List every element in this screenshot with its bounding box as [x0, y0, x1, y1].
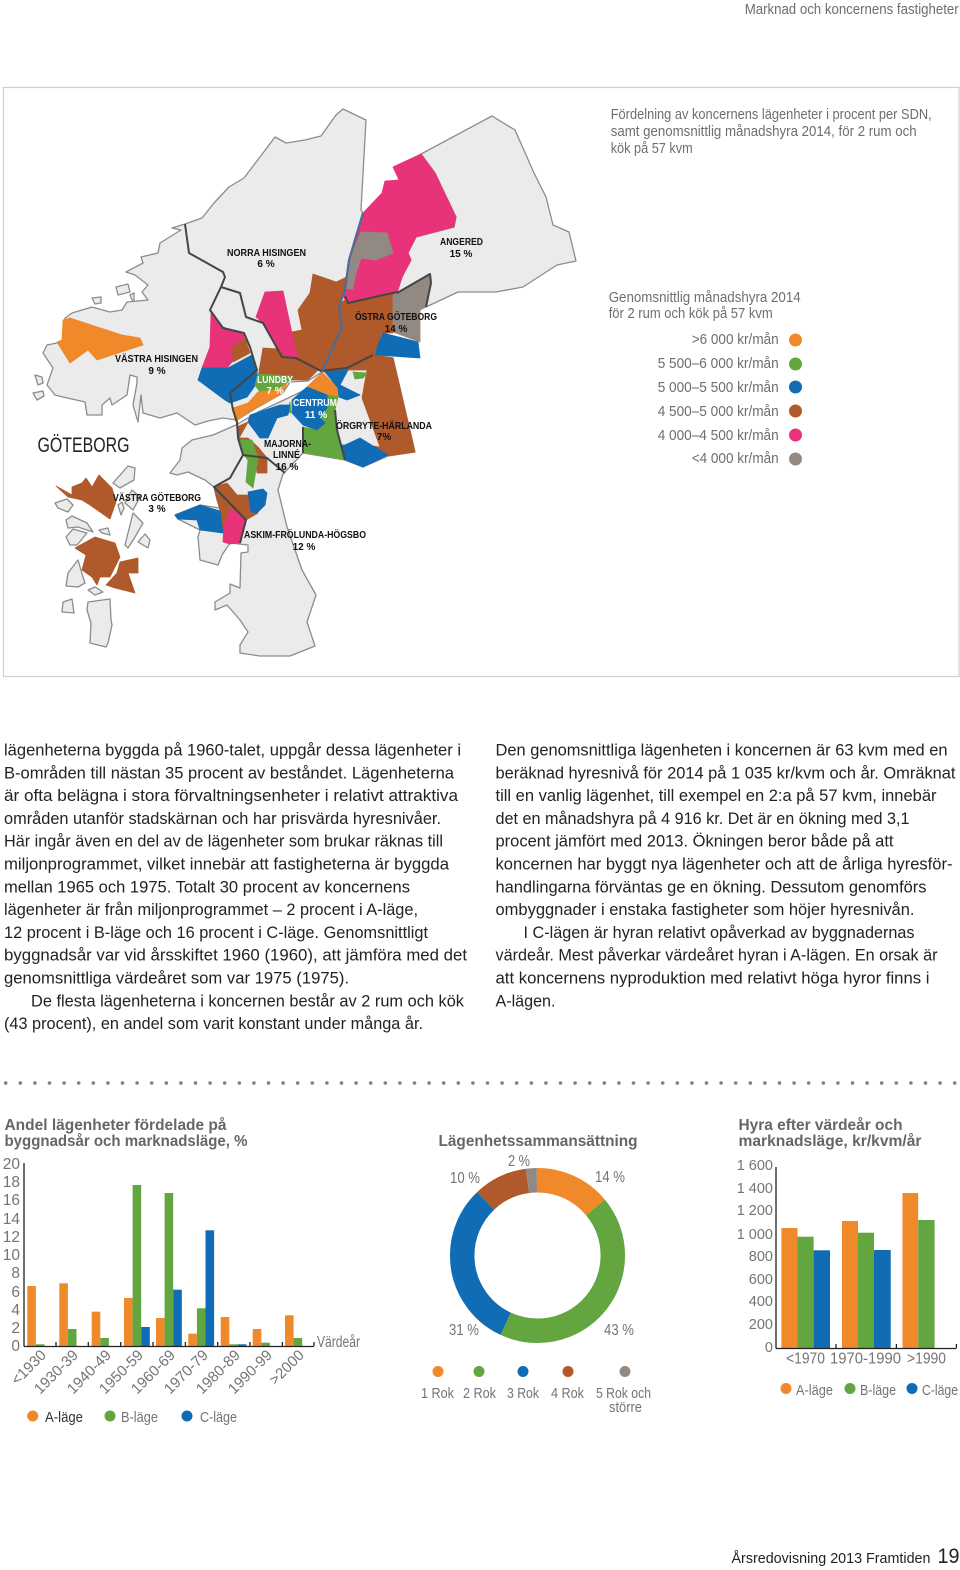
map labels: districts: 16 %: [276, 462, 299, 473]
chart: apartments by building year and market position: [3, 1116, 360, 1426]
y-axis labels: [737, 1158, 773, 1356]
text column: left: De flesta lägenheterna i koncernen består av 2 rum och kök: [31, 992, 465, 1010]
map labels: districts: ANGERED: [440, 237, 483, 248]
axes: [24, 1163, 314, 1346]
axis title: Värdeår: Värdeår: [317, 1334, 360, 1351]
legend: [780, 1383, 958, 1399]
x-axis labels: <1970: [786, 1350, 825, 1368]
y-axis labels: 18: [3, 1174, 20, 1191]
text column: right: ombyggnader i enstaka fastigheter som höjer hyresnivån.: [496, 901, 914, 919]
text column: left: byggnadsår var vid årsskiftet 1960 (1960), att jämföra med det: [4, 947, 467, 965]
text column: right: [496, 742, 956, 1010]
map labels: districts: ÖRGRYTE-HÄRLANDA: [336, 419, 432, 432]
y-axis labels: 1 600: [737, 1158, 773, 1174]
text column: right: beräknad hyresnivå för 2014 på 1 035 kr/kvm och år. Omräknat: [496, 764, 956, 782]
legend: 5 Rok och: [596, 1386, 651, 1402]
map labels: districts: [113, 237, 483, 553]
text column: right: koncernen har byggt nya lägenheter och att de årliga hyresför-: [496, 856, 952, 874]
map labels: districts: 9 %: [148, 366, 166, 377]
y-axis labels: 2: [11, 1320, 20, 1337]
chart title: [4, 1116, 248, 1150]
text column: left: B-områden till nästan 35 procent av beståndet. Lägenheterna: [4, 764, 455, 782]
map labels: districts: 14 %: [385, 324, 408, 335]
chart title: Hyra efter värdeår och: [738, 1116, 902, 1134]
y-axis labels: 6: [11, 1284, 20, 1301]
map label: Göteborg: GÖTEBORG: [38, 434, 130, 457]
legend: [27, 1410, 237, 1426]
map: river: [322, 213, 363, 372]
text column: right: procent jämfört med 2013. Ökningen beror både på att: [496, 833, 894, 851]
x-axis labels: 1930-39: [31, 1347, 82, 1398]
text column: left: mellan 1965 och 1975. Totalt 30 procent av koncernens: [4, 878, 410, 896]
percentage labels: 10 %: [450, 1170, 480, 1187]
y-axis labels: 1 000: [737, 1227, 773, 1243]
map legend: monthly rent: 4 500–5 000 kr/mån: [658, 403, 779, 420]
legend: A-läge: [45, 1410, 83, 1426]
text column: right: att koncernens nyproduktion med relativt höga hyror finns i: [496, 970, 930, 988]
map labels: districts: VÄSTRA HISINGEN: [115, 352, 198, 365]
text column: left: områden utanför stadskärnan och har prisvärda hyresnivåer.: [4, 810, 441, 828]
legend: 3 Rok: [507, 1386, 540, 1402]
map labels: districts: LINNÉ: [273, 448, 300, 461]
legend: 4 Rok: [551, 1386, 585, 1402]
y-axis labels: 400: [749, 1294, 773, 1310]
x-axis labels: 1990-99: [225, 1347, 276, 1398]
x-axis labels: 1980-89: [193, 1347, 244, 1398]
x-axis labels: 1950-59: [96, 1347, 147, 1398]
map labels: districts: ÖSTRA GÖTEBORG: [355, 310, 437, 323]
map labels: districts: NORRA HISINGEN: [227, 248, 306, 259]
y-axis labels: 1 200: [737, 1203, 773, 1219]
y-axis labels: 0: [11, 1338, 20, 1355]
chart title: Andel lägenheter fördelade på: [4, 1116, 227, 1134]
percentage labels: 31 %: [449, 1322, 479, 1339]
map: land areas: [33, 109, 576, 656]
y-axis labels: 12: [3, 1229, 20, 1246]
legend: 1 Rok: [421, 1386, 455, 1402]
y-axis labels: 1 400: [737, 1181, 773, 1197]
text column: left: lägenheter är från miljonprogrammet – 2 procent i A-läge,: [4, 901, 418, 919]
text column: right: värdeår. Mest påverkar värdeåret hyran i A-lägen. En orsak är: [496, 947, 938, 965]
legend: B-läge: [121, 1410, 158, 1426]
legend: större: [609, 1400, 642, 1416]
page footer: Årsredovisning 2013 Framtiden: [732, 1550, 930, 1567]
text column: right: A-lägen.: [496, 992, 556, 1010]
text column: left: (43 procent), en andel som varit konstant under många år.: [4, 1015, 423, 1033]
map labels: districts: 15 %: [450, 249, 473, 260]
map labels: districts: 7 %: [266, 386, 284, 397]
legend: A-läge: [796, 1383, 833, 1399]
percentage labels: [449, 1153, 634, 1339]
y-axis labels: 14: [3, 1211, 20, 1228]
map legend: monthly rent: Genomsnittlig månadshyra 2014: [609, 289, 801, 306]
x-axis labels: 1970-79: [161, 1347, 212, 1398]
y-axis labels: 0: [765, 1340, 773, 1356]
y-axis labels: 4: [11, 1302, 20, 1319]
x-axis labels: [786, 1350, 946, 1368]
map description: kök på 57 kvm: [611, 140, 693, 157]
x-axis labels: 1960-69: [128, 1347, 179, 1398]
chart title: Lägenhetssammansättning: [438, 1133, 638, 1150]
axes: [776, 1167, 956, 1348]
map labels: districts: 11 %: [305, 410, 327, 421]
bars: [27, 1185, 302, 1346]
map: district borders: [185, 224, 431, 543]
map labels: districts: 3 %: [148, 504, 166, 515]
y-axis labels: 10: [3, 1247, 20, 1264]
y-axis labels: 600: [749, 1272, 773, 1288]
text column: left: lägenheterna byggda på 1960-talet, uppgår dessa lägenheter i: [4, 742, 461, 760]
page footer: [732, 1545, 960, 1568]
map labels: districts: LUNDBY: [257, 375, 293, 386]
map labels: districts: 6 %: [257, 259, 275, 270]
chart title: marknadsläge, kr/kvm/år: [738, 1132, 922, 1150]
text column: left: 12 procent i B-läge och 16 procent i C-läge. Genomsnittligt: [4, 924, 428, 942]
y-axis labels: [3, 1156, 20, 1355]
map labels: districts: CENTRUM: [293, 398, 337, 409]
panel: map of Göteborg: [4, 88, 959, 676]
chart title: [738, 1116, 922, 1150]
map labels: districts: VÄSTRA GÖTEBORG: [113, 491, 201, 504]
y-axis labels: 16: [3, 1192, 20, 1209]
text column: left: miljonprogrammet, vilket innebär att fastigheterna är byggda: [4, 856, 450, 874]
map legend: monthly rent: 5 500–6 000 kr/mån: [658, 355, 779, 372]
text column: right: Den genomsnittliga lägenheten i koncernen är 63 kvm med en: [496, 742, 948, 760]
text column: left: Här ingår även en del av de lägenheter som brukar räknas till: [4, 833, 443, 851]
map legend: monthly rent: <4 000 kr/mån: [692, 450, 779, 467]
y-axis labels: 800: [749, 1249, 773, 1265]
map legend: monthly rent: för 2 rum och kök på 57 kvm: [609, 305, 773, 322]
x-axis labels: 1940-49: [64, 1347, 115, 1398]
map legend: monthly rent: [609, 289, 802, 467]
x-axis labels: >1990: [907, 1350, 946, 1368]
map labels: districts: ASKIM-FRÖLUNDA-HÖGSBO: [244, 528, 366, 541]
map description: samt genomsnittlig månadshyra 2014, för 2 rum och: [611, 123, 917, 140]
y-axis labels: 200: [749, 1317, 773, 1333]
legend: C-läge: [200, 1410, 237, 1426]
percentage labels: 14 %: [595, 1169, 625, 1186]
map legend: monthly rent: 4 000–4 500 kr/mån: [658, 427, 779, 444]
text column: right: det en månadshyra på 4 916 kr. Det är en ökning med 3,1: [496, 810, 910, 828]
donut: [462, 1180, 613, 1331]
map legend: monthly rent: >6 000 kr/mån: [692, 331, 779, 348]
x-axis labels: 1970-1990: [830, 1350, 901, 1368]
map labels: districts: MAJORNA-: [264, 439, 311, 450]
text column: right: till en vanlig lägenhet, till exempel en 2:a på 57 kvm, innebär: [496, 787, 937, 805]
legend: [421, 1366, 651, 1416]
map description: [611, 106, 932, 157]
x-axis labels: <1930: [8, 1347, 50, 1389]
text column: right: handlingarna förväntas ge en ökning. Dessutom genomförs: [496, 878, 926, 896]
map labels: districts: 12 %: [293, 542, 316, 553]
legend: 2 Rok: [463, 1386, 497, 1402]
chart: rent by value year and market position: [737, 1116, 958, 1399]
x-axis labels: >2000: [266, 1347, 308, 1389]
map: rent level areas: [56, 154, 456, 593]
map legend: monthly rent: 5 000–5 500 kr/mån: [658, 379, 779, 396]
chart title: byggnadsår och marknadsläge, %: [4, 1132, 248, 1150]
y-axis labels: 8: [11, 1265, 20, 1282]
y-axis labels: 20: [3, 1156, 20, 1173]
text column: left: [4, 742, 467, 1033]
bars: [781, 1193, 935, 1348]
text column: right: I C-lägen är hyran relativt opåverkad av byggnadernas: [524, 924, 914, 942]
legend: B-läge: [860, 1383, 896, 1399]
text column: left: genomsnittliga värdeåret som var 1975 (1975).: [4, 970, 349, 988]
chart: apartment composition donut: [421, 1133, 651, 1416]
x-axis labels: [8, 1347, 308, 1398]
percentage labels: 2 %: [508, 1153, 530, 1170]
map labels: districts: 7%: [377, 432, 391, 443]
percentage labels: 43 %: [604, 1322, 634, 1339]
text column: left: är ofta belägna i stora förvaltningsenheter i relativt attraktiva: [4, 787, 459, 805]
